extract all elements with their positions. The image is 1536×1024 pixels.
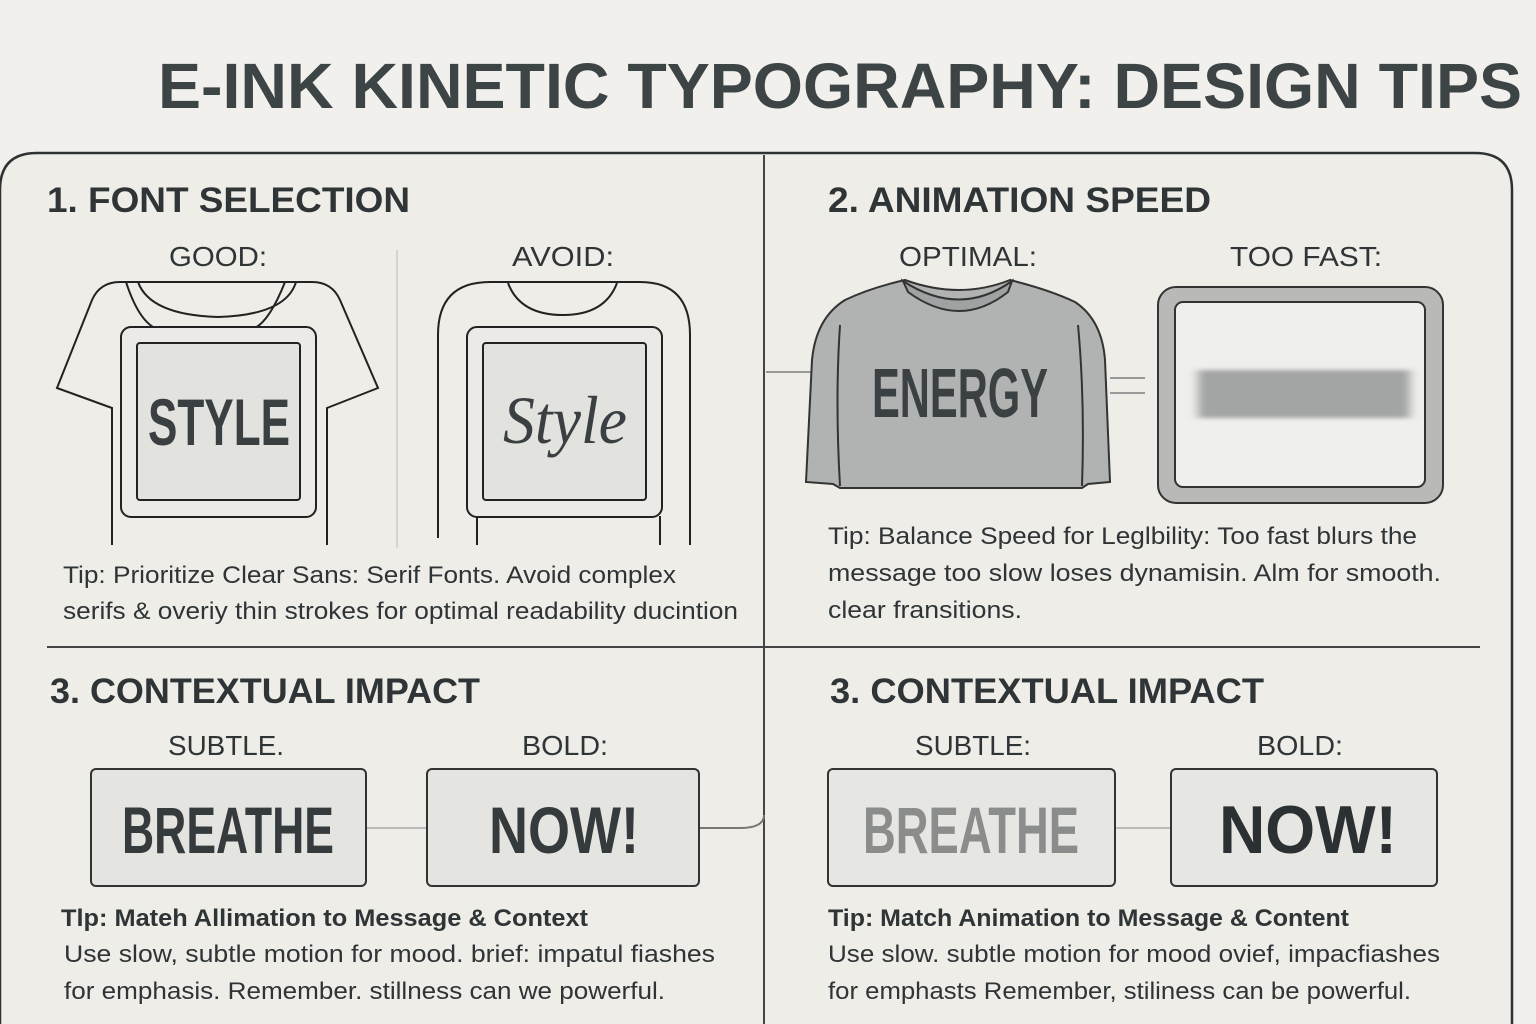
box breathe faded: BREATHE <box>863 793 1079 867</box>
heading 2: 2. ANIMATION SPEED <box>828 181 1211 220</box>
tip 2: message too slow loses dynamisin. Alm for smooth. <box>828 560 1441 587</box>
box breathe <box>91 769 366 886</box>
label bold: BOLD: <box>522 730 608 761</box>
heading 4: 3. CONTEXTUAL IMPACT <box>830 672 1264 711</box>
tip 3: Use slow, subtle motion for mood. brief: impatul fiashes <box>64 941 715 968</box>
tip 3: Tlp: Mateh Allimation to Message & Context <box>61 905 588 932</box>
text: Style script: Style <box>503 382 627 458</box>
label bold 2: BOLD: <box>1257 730 1343 761</box>
title: E-INK KINETIC TYPOGRAPHY: DESIGN TIPS <box>158 50 1522 122</box>
label too fast: TOO FAST: <box>1230 241 1382 272</box>
panel: contextual impact left <box>50 672 764 1005</box>
icon: sweater <box>806 280 1110 488</box>
panel: font selection <box>47 181 738 625</box>
heading 1: 1. FONT SELECTION <box>47 181 410 220</box>
label optimal: OPTIMAL: <box>899 241 1037 272</box>
tip 4: for emphasts Remember, stiliness can be powerful. <box>828 978 1411 1005</box>
tip 4: Use slow. subtle motion for mood ovief, impacfiashes <box>828 941 1440 968</box>
icon: too fast screen <box>1158 287 1443 503</box>
tip 1: serifs & overiy thin strokes for optimal readability ducintion <box>63 598 738 625</box>
label avoid: AVOID: <box>512 241 614 272</box>
tip 2 <box>828 523 1441 624</box>
box breathe faded <box>828 769 1115 886</box>
tip 1: Tip: Prioritize Clear Sans: Serif Fonts. Avoid complex <box>63 562 676 589</box>
tip 2: clear fransitions. <box>828 597 1022 624</box>
heading 3: 3. CONTEXTUAL IMPACT <box>50 672 480 711</box>
label subtle: SUBTLE. <box>168 730 284 761</box>
tip 3 <box>61 905 715 1005</box>
box now bold: NOW! <box>1219 792 1397 868</box>
label subtle 2: SUBTLE: <box>915 730 1031 761</box>
icon: t-shirt good <box>57 282 378 545</box>
box now: NOW! <box>489 793 639 867</box>
box breathe: BREATHE <box>122 793 334 867</box>
text: ENERGY: ENERGY <box>872 354 1048 432</box>
text: STYLE: STYLE <box>148 385 290 459</box>
box now bold <box>1171 769 1437 886</box>
tip 4 <box>828 905 1440 1005</box>
tip 2: Tip: Balance Speed for Leglbility: Too fast blurs the <box>828 523 1417 550</box>
panel: animation speed <box>766 181 1443 624</box>
box now <box>427 769 699 886</box>
label good: GOOD: <box>169 241 267 272</box>
icon: shirt avoid <box>438 282 690 545</box>
tip 4: Tip: Match Animation to Message & Content <box>828 905 1349 932</box>
tip 1 <box>63 562 738 625</box>
panel: contextual impact right <box>828 672 1440 1005</box>
tip 3: for emphasis. Remember. stillness can we powerful. <box>64 978 665 1005</box>
